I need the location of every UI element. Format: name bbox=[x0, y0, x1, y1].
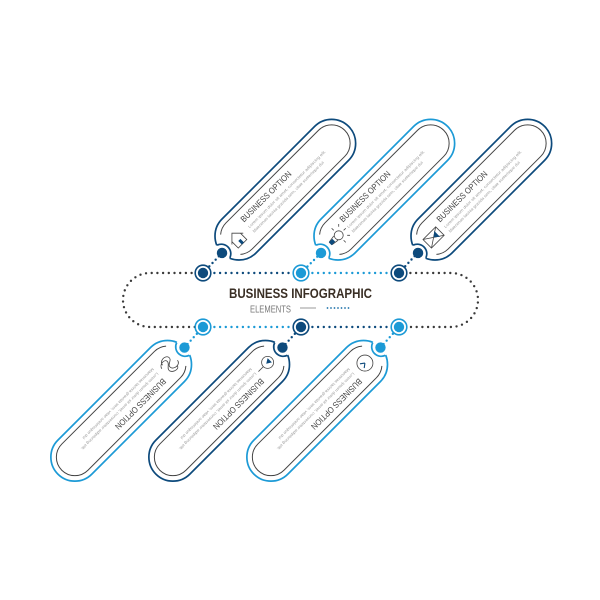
connector: card 2 bbox=[301, 252, 322, 273]
heading: business option: BUSINESS OPTION bbox=[211, 377, 266, 432]
subtitle: ELEMENTS bbox=[250, 304, 291, 316]
connector: card 5 bbox=[282, 327, 301, 348]
panel: card 4 dollar bbox=[41, 323, 209, 491]
text block: Lorem ipsum dolor sit amet, consectetur adipiscing elit. bbox=[276, 372, 356, 451]
panel: card 3 hourglass bbox=[394, 109, 562, 277]
icon: hourglass bbox=[423, 227, 444, 248]
node: bottom right bbox=[391, 319, 407, 335]
connector: card 1 bbox=[203, 252, 222, 273]
heading: business option: BUSINESS OPTION bbox=[238, 169, 293, 224]
text block: Maecenas lacinia gravida sem, vitae scelerisque dui bbox=[82, 367, 155, 441]
decorative line: gray bbox=[300, 307, 316, 309]
icon: coins bbox=[157, 352, 182, 377]
panel: card 6 clock bbox=[237, 323, 405, 491]
text block: Lorem ipsum dolor sit amet, consectetur adipiscing elit. bbox=[443, 149, 523, 229]
node: top right bbox=[391, 265, 407, 281]
node: top center bbox=[293, 265, 309, 281]
connector: card 3 bbox=[399, 252, 418, 273]
text block: Lorem ipsum dolor sit amet, consectetur adipiscing elit. bbox=[247, 149, 327, 229]
text block: Maecenas lacinia gravida sem, vitae scelerisque dui bbox=[447, 160, 521, 234]
dotted track: top left segment bbox=[203, 272, 301, 274]
heading: business option: BUSINESS OPTION bbox=[113, 377, 168, 432]
decorative line: blue dots bbox=[328, 307, 349, 309]
title: BUSINESS INFOGRAPHIC bbox=[229, 285, 372, 301]
connector: card 6 bbox=[380, 327, 399, 348]
dotted track: bottom left segment bbox=[203, 326, 301, 328]
heading: business option: BUSINESS OPTION bbox=[337, 169, 392, 224]
text block: Lorem ipsum dolor sit amet, consectetur adipiscing elit. bbox=[80, 372, 160, 451]
heading: business option: BUSINESS OPTION bbox=[309, 377, 364, 432]
node: bottom center bbox=[293, 319, 309, 335]
dotted track: bottom right segment bbox=[301, 326, 399, 328]
heading: business option: BUSINESS OPTION bbox=[434, 169, 489, 224]
icon: light bulb bbox=[323, 221, 353, 251]
text block: Lorem ipsum dolor sit amet, consectetur adipiscing elit. bbox=[178, 372, 258, 451]
icon: clock bbox=[354, 352, 376, 374]
text block: Maecenas lacinia gravida sem, vitae scelerisque dui bbox=[350, 160, 424, 234]
text block: Maecenas lacinia gravida sem, vitae scelerisque dui bbox=[180, 367, 253, 441]
panel: card 1 house bbox=[198, 109, 366, 277]
icon: house bbox=[226, 228, 248, 249]
node: top left bbox=[195, 265, 211, 281]
dotted track: top right segment bbox=[301, 272, 399, 274]
node: bottom left bbox=[195, 319, 211, 335]
panel: card 2 bulb bbox=[297, 109, 465, 277]
dotted track: right end bbox=[399, 273, 478, 327]
icon: magnifier bbox=[254, 354, 276, 376]
text block: Lorem ipsum dolor sit amet, consectetur adipiscing elit. bbox=[346, 149, 426, 229]
text block: Maecenas lacinia gravida sem, vitae scelerisque dui bbox=[251, 160, 325, 234]
panel: card 5 magnifier bbox=[139, 323, 307, 491]
text block: Maecenas lacinia gravida sem, vitae scelerisque dui bbox=[278, 367, 351, 441]
dotted track: left end bbox=[123, 273, 203, 327]
connector: card 4 bbox=[184, 327, 203, 348]
